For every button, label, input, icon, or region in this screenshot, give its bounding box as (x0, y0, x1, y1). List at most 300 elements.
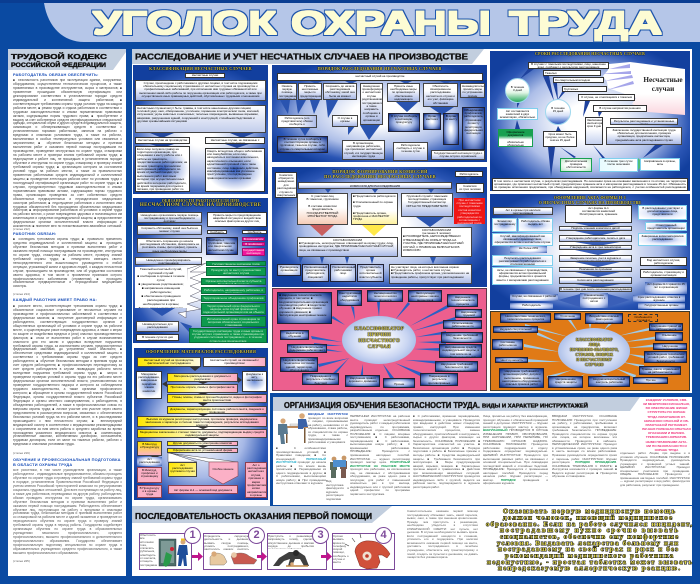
callout: term (543, 131, 577, 147)
panel: documentation (490, 194, 690, 310)
panel: causes classifier (272, 288, 487, 391)
cause box: Эксплуатация неисправных машин, механизмов (411, 291, 439, 302)
box: Акт расследования группового случая (170, 463, 195, 473)
step 4 number (375, 527, 392, 544)
box: Работодателю, страховщику и органам инспекции (643, 270, 684, 277)
warning text: МИ ПО БЕЗОПАСНОСТИ И (646, 444, 687, 448)
box (510, 294, 558, 301)
callout: yellow warning text: пострадавшему нужно срочно вызвать (500, 527, 678, 534)
box (492, 218, 517, 232)
box: notes: ■ Представитель профсоюза органа, уполномоченного на проведение работы, присутствует при расследовании (391, 271, 469, 279)
box (495, 357, 528, 363)
panel title: ПО РАССЛЕДОВАНИЮ НЕСЧАСТНЫХ СЛУЧАЕВ (324, 174, 436, 179)
box: composition 1: ИНСПЕКТОР ТРУДА (308, 214, 337, 218)
box: Утомление (560, 314, 575, 318)
box: Ответственный представитель организации (647, 223, 685, 230)
box (638, 233, 687, 246)
step 1 number (184, 527, 201, 544)
box (493, 207, 553, 215)
step 3 number: 3 (317, 529, 324, 541)
callout: term: Срок может быть продлен, но не более чем на 15 дней (545, 132, 575, 142)
panel: registration of investigation results (134, 348, 268, 500)
text: column 3: ■ С работниками, временно переводимыми, командированными, и учащимися. Проводится при введении в действие новых стандартов, правил, инструкций. При изменении технологических процессов, замене оборудования, приспособлений и инструмента, сырья и других факторов, влияющих на безопасность. ОСНОВНЫЕ ПОЛОЖЕНИЯ: ■ Характеристика опасностей на участке. ■ Безопасная организация работ. ■ Порядок подготовки к работе. ■ Безопасные приемы и методы работы. ■ Средства индивидуальной защиты. ■ Требования безопасности при эксплуатации. ■ Меры предупреждения аварий, взрывов, пожаров. ■ Характерные причины аварий и травматизма. ■ Действия при возникновении аварийных ситуаций. НАСТАВНИЧЕСКИЙ ИНСТРУКТАЖ проводится индивидуально либо с группой, ведется на рабочем месте, подтверждается в журнале регистрации работ. (413, 415, 480, 489)
box (606, 127, 682, 145)
box: Пояснения по причинам (579, 267, 612, 271)
box: composition 3 (401, 193, 453, 217)
step 4 frame (332, 533, 395, 570)
label left: Несчастные случаи на производстве (138, 138, 187, 142)
box (548, 376, 583, 388)
box (137, 357, 201, 367)
box (554, 313, 581, 320)
box: Немедленно проинформировать родственников (146, 258, 191, 265)
warning text: РАБОТАННОЙ РЕГЛАМЕНТ. (645, 423, 688, 427)
box: dark 4 (462, 107, 485, 150)
bar: commission (298, 182, 452, 189)
warning text: ВО ОБЕСПЕЧЕНИЕ ЖИЗНИ (646, 406, 687, 410)
box: dark left: В течение суток сообщить в соответствующие органы о групповом, тяжелом случае, либо случае со смертельным исходом (280, 137, 325, 151)
box (640, 257, 687, 266)
box: Сообщить (248, 230, 261, 234)
callout: yellow warning text: образование. Если на работе случился инцидент, (486, 521, 692, 528)
green box: Государственную инспекцию труда (212, 262, 260, 266)
step 4 number: 4 (380, 529, 387, 541)
box (168, 485, 238, 494)
box (136, 371, 162, 399)
box: role 1: Руководитель организации (280, 265, 298, 272)
box: composition 3: ОРГАН ПО ПРЕДСТАВИТЕЛЮ (406, 204, 448, 208)
centre title: КЛАССИФИКАТОР (576, 338, 612, 342)
box: commission staff (297, 237, 398, 257)
box: role 4 (357, 264, 384, 282)
box: Несчастный случай, не связанный с производством (210, 358, 259, 365)
box: dark 2: Орган местного (426, 114, 438, 121)
box (137, 457, 162, 466)
callout: yellow warning text: пострадавшему на свой страх и риск и без (498, 546, 678, 553)
text: column 4: Лица, принятые на работу без квалификации, проходят обучение с обязательной проверкой знаний и допуском. ИНСТРУКТАЖ — Журнал регистрации проводит мастер в журнале. ВНЕПЛАНОВЫЙ ПРОВОДИТСЯ В СЛУЧАЕ ИЗМЕНЕНИЯ ПРАВИЛ, ОБОРУДОВАНИЯ, ПРИ НАРУШЕНИИ, ПРИ ПЕРЕРЫВЕ, ПО ТРЕБОВАНИЮ ОРГАНОВ НАДЗОРА. ОСНОВНЫЕ ПОЛОЖЕНИЯ: Проводится работникам подразделения и отделу. Содержание определяют индивидуально. ЦЕЛЕВОЙ ИНСТРУКТАЖ: Проводится при выполнении разовых работ, не связанных с основной специальностью. При ликвидации последствий аварий и стихийных бедствий. ПРОВЕДЕНИЕ: Проводится с применением наглядных пособий. Проводится перед началом работ. Журнал регистрации — мастер. ПОРЯДОК проведения и оформления журнала. (483, 415, 548, 485)
box: right definitions: Смерть вследствие общего заболевания или самоубийства; если лицо находилось в состоянии алкогольного, наркотического опьянения; если единственной причиной стало такое состояние; лицо совершало действия, квалифицированные как уголовное преступление, что подтверждено правоохранительными органами (207, 149, 262, 180)
text: column 6: отдельных работ. Лицам, при выдаче и в условиях обучения. ОСНОВНЫЕ ПОЛОЖЕНИЯ: Проводится индивидуально, руководитель учреждения с проверкой устных знаний. ЦЕЛЕВОЙ ИНСТРУКТАЖ: Проводят специальных участников при проведении. ОБЩИЕ ПОЛОЖЕНИЯ: Проводится с применением наглядных пособий. ИНСТРУКТАЖ — журнал регистрации и вид работ, фиксируется для работника, результат при проведении. (620, 452, 690, 487)
box: role 2: Уполномоченный представитель работодателя, специалист (304, 265, 327, 279)
cause box: Конструктивные недостатки оборудования (339, 291, 361, 302)
box: composition 1: ГОСУДАРСТВЕННЫЙ (307, 211, 338, 215)
box: и Прокуратуру (140, 445, 159, 449)
box: Групповых (564, 87, 578, 91)
box: В случае непринятия решения (599, 106, 641, 110)
box: lower: В организацию, направившую работника, где произошел несчастный случай, и в государственную инспекцию труда (344, 141, 383, 158)
panel: labour code column (8, 49, 126, 576)
step: Другие документы по усмотрению комиссии (173, 441, 232, 445)
box: composition 1: В тяжелом, групповом (306, 197, 338, 201)
box (559, 226, 632, 231)
centre title: СТРАХОВ, ПОВРЕЖ (575, 353, 613, 357)
box: role 3 (330, 264, 356, 282)
cause box (337, 290, 362, 306)
heading: worker duties: РАБОТНИК ОБЯЗАН: (13, 231, 56, 236)
box (588, 376, 630, 387)
box: Неприменение средств защиты (555, 377, 577, 384)
box: commission staff: ■ Руководитель, непосредственно отвечающий за охрану труда; лицо, проводившее инструктаж; ГДЕ ПРОИЗОШЕЛ НЕСЧАСТНЫЙ СЛУЧАЙ; лица, не связанные с производством (299, 241, 394, 252)
box: Работодатель обязан выдать акт (521, 219, 550, 226)
box: act green: Оформление документов (507, 130, 524, 137)
box: В течение трех суток после окончания (604, 159, 633, 166)
note: article 225: (статья 225) (13, 559, 30, 563)
box: Тяжелых (545, 71, 557, 75)
box: Несоблюдение технических условий работ, требований безопасности (647, 352, 684, 363)
box: Незамедлительно для расследования (142, 322, 173, 329)
cause box (367, 290, 403, 302)
cause box: Прочие (394, 382, 404, 386)
box (207, 230, 227, 234)
box (655, 332, 683, 341)
box (203, 357, 266, 367)
box: accidents (185, 73, 225, 78)
step: Документы, характеризующие состояние рабочего места, сведения о проведении (170, 407, 264, 414)
box: Подпись членами комиссии и датой (571, 226, 620, 230)
box: Документы к акту, заключения (246, 372, 263, 382)
box (638, 303, 685, 309)
box: consequences: Несчастным случаем могут быть: травмы, в том числе нанесенные другими лицами; тепловой удар; ожог, обморожение, утопление; поражение электрическим током, молнией, излучением; укусы животных и насекомых; телесные повреждения, вызванные взрывами, авариями, разрушением зданий, сооружений и конструкций, стихийными бедствиями и другими чрезвычайными ситуациями (137, 106, 259, 123)
panel title: ОФОРМЛЕНИЕ АКТА ФОРМЫ Н-1 (554, 196, 626, 200)
box: dark 4: Объединение профсоюзов, работодатель, страховщик по месту регистрации, федеральная инспекция (464, 108, 483, 135)
box: composition 2 (351, 193, 398, 225)
box: Направление в органы, акты (644, 159, 676, 166)
label left (135, 137, 190, 144)
box (136, 334, 179, 341)
cause box (345, 375, 380, 387)
box (135, 257, 202, 265)
box (207, 212, 267, 227)
circle: 15 days: В течение (551, 106, 565, 110)
box: dark (206, 237, 238, 255)
panel: training organisation (273, 397, 692, 505)
box: dark 1: О случае сообщить в инспекцию, прокуратуру (391, 114, 417, 124)
box: В Минтруд (142, 442, 157, 446)
cause box: Нарушение правил дорожного движения (349, 376, 377, 383)
box (593, 105, 647, 112)
step 2 number (248, 527, 265, 544)
box: commission staff right (401, 227, 472, 257)
box: Акт формы Н-1 — основной вид документа (174, 488, 232, 492)
centre title: ПРИЧИН (367, 333, 391, 338)
step 2 frame (203, 533, 262, 570)
arrow box: Особое мнение (212, 467, 234, 471)
box: left note: ■ уведомление родственников; (139, 282, 183, 286)
box: bottom 1: Работодателю сообщить о случае в течение суток (396, 143, 425, 153)
box: act green: обязательно (507, 140, 524, 144)
box (559, 245, 632, 250)
box: Опьянение (662, 333, 677, 337)
box (510, 246, 547, 253)
cause box: Неудовлетворительное техническое состояние зданий, территории, оборудования (283, 358, 315, 372)
box: left note: ■ сообщение в органы в течение суток; (137, 274, 185, 282)
box: form N-1: Регистрация акта, хранение (580, 212, 617, 216)
title: УГОЛОК (93, 5, 277, 41)
text: column 1 lower: ■ С особенностями производственных условий; ■ Правилами поведения; ■ Со спецодеждой; ПЕРВИЧНЫЙ ИНСТРУКТАЖ проводят до начала работы: ■ Со всеми вновь принятыми; ■ Переводимыми из одного подразделения в другое; ■ С работниками, выполняющими новую работу; ■ При проведении инструктажа отмечают в журнале (276, 447, 326, 485)
panel: victim classifier (490, 311, 690, 391)
centre title (569, 337, 620, 367)
box: left note: ■ обеспечение проведения расследования при необходимости в органы; (141, 294, 181, 306)
labour code header: РОССИЙСКОЙ ФЕДЕРАЦИИ (11, 61, 106, 69)
step 1 frame (139, 533, 192, 570)
text: worker duties: ■ соблюдать требования охраны труда; ■ правильно применять средства индивидуальной и коллективной защиты; ■ проходить обучение безопасным методам и приемам выполнения работ и оказанию первой помощи пострадавшим на производстве, инструктаж по охране труда, стажировку на рабочем месте, проверку знаний требований охраны труда; ■ немедленно извещать своего непосредственного или вышестоящего руководителя о любой ситуации, угрожающей жизни и здоровью людей, о каждом несчастном случае, происшедшем на производстве, или об ухудшении состояния своего здоровья, в том числе о проявлении признаков острого профессионального заболевания (отравления); ■ проходить обязательные предварительные и периодические медицинские осмотры. (13, 238, 122, 288)
centre title: ПОЧВЕННО-ПЫЛЕВОГО, (570, 348, 619, 352)
box: Утверждение акта в трех экземплярах (570, 245, 621, 249)
box: commission (456, 183, 484, 193)
panel: first aid sequence (132, 506, 692, 576)
panel title (139, 198, 262, 208)
box: Заключение государственной инспекции труда обязательно для выполнения, проверка организации, предписание инспектора, предъявление акта расследования случая (613, 128, 675, 142)
label: accidents: Несчастные (643, 76, 683, 84)
panel title: СРОКИ РАССЛЕДОВАНИЯ НЕСЧАСТНЫХ СЛУЧАЕВ (535, 52, 645, 56)
box: composition 1 (297, 193, 348, 225)
box: green: Дополнительная проверка обстоятельств (565, 159, 587, 169)
centre title: И НЕСЧАСТНОМУ (576, 358, 612, 362)
box: bottom 2 (431, 150, 485, 160)
warning text: СТРУКТУРЫ ПО ОХРАНЕ (648, 410, 685, 414)
step (167, 448, 238, 453)
box: Неосторожность (501, 358, 523, 362)
green box: Территориальное объединение профсоюзов (203, 296, 264, 300)
cause box (455, 309, 482, 318)
step: Планы, эскизы, схемы и при необходимости, видео и фотографии места происшествия (172, 395, 262, 402)
box: Заключение инспектора, срок 3 дня (587, 118, 603, 128)
magenta box: В прокуратуру (244, 237, 263, 241)
circle: 3 days (505, 78, 530, 103)
step 3 number (312, 527, 329, 544)
cause box: Неудовлетворительное содержание рабочих мест (290, 345, 325, 352)
box: Заверенные копии материалов расследования (642, 234, 684, 241)
box: composition 2: ■ Представитель органа, профсоюза и ИНСПЕКТОР ТРУДА (353, 211, 389, 221)
heading: worker rights: КАЖДЫЙ РАБОТНИК ИМЕЕТ ПРАВО НА: (13, 297, 97, 302)
panel: accident investigation procedure (272, 65, 487, 162)
box (633, 377, 668, 384)
box: Нарушение правил на рабочем месте (651, 324, 681, 331)
box: commission staff right: СОСТАВ КОМИССИИ (422, 228, 451, 232)
box (653, 343, 687, 350)
callout: yellow warning text: должен человек, имеющий медицинское (503, 514, 672, 522)
box: Материалы расследования, заверенные подписями членов комиссии (138, 372, 160, 393)
box: Прочие (646, 378, 656, 382)
step 3 frame (267, 533, 327, 570)
panel: forming the commission (272, 167, 487, 287)
callout: yellow warning text: рекомендаций медицинского работника (505, 552, 674, 560)
box (628, 314, 658, 322)
box (645, 282, 687, 294)
warning text: КАЖДОМУ УСЛОВИЯ, СВЯ- (646, 398, 687, 402)
warning text (642, 398, 691, 452)
box: act (277, 73, 483, 81)
centre title (354, 326, 404, 350)
box: dark 3 (443, 113, 459, 145)
box: act green (498, 129, 533, 147)
box (137, 467, 162, 483)
header band: ОРГАНИЗАЦИЯ ОБУЧЕНИЯ БЕЗОПАСНОСТИ ТРУДА. (284, 400, 480, 410)
box (136, 321, 179, 332)
cause box: Нарушение требований безопасности (446, 333, 478, 340)
cause box: ■ Нарушение технологического процесса, в том числе: ■ Неудовлетворительная организация производства работ; ■ Недостатки обучения; ■ Нарушение правил дорожного движения; ■ Эксплуатация неисправных машин (279, 293, 328, 317)
box: Нарушение требований к организации работ, допуск к выполнению, применение неисправного оборудования, опасных приемов работ (502, 369, 541, 386)
callout: yellow warning text: непредсказуемую аллергическую реакцию. (498, 565, 680, 572)
box: notes: Не участвуют лица, на которых возложена охрана: (391, 265, 459, 269)
box (640, 158, 680, 171)
centre title: КЛАССИФИКАТОР (354, 327, 404, 332)
label: accidents: случаи (652, 85, 674, 93)
labour code header: ТРУДОВОЙ КОДЕКС (11, 52, 107, 61)
box: composition 2: ■ Уполномоченный по охране труда (353, 200, 393, 208)
box: Несчастный случай на производстве, фактический акт пострадавшего (144, 358, 194, 365)
box (242, 371, 267, 392)
note: article 219: (статья 219) (13, 451, 30, 455)
box: column 6: Обеспечить своевременное расследование несчастного случая и его учет, фиксацию обстановки (426, 84, 455, 105)
box (492, 267, 553, 285)
box: В расследовании участвуют и дополнительные лица, представители (642, 206, 683, 216)
panel: medical and investigation procedure (133, 198, 268, 343)
cause box (420, 373, 458, 386)
step (167, 373, 238, 382)
cause box: Повреждения в результате стихийных бедствий (306, 374, 335, 385)
box: accidents: Несчастные случаи (192, 73, 218, 77)
cause box (277, 292, 332, 324)
green box: Территориальный орган федерального надзора, если случай произошел в подконтрольной организации или на объекте (203, 304, 264, 314)
box (559, 277, 632, 284)
circle: 3 days: В течение (511, 85, 524, 89)
box: В течение трех дня после окончания расследования (560, 287, 631, 291)
box: notes: ■ Руководитель работ, о несчастном случае; (391, 268, 451, 272)
box: Принять меры по предотвращению аварийной ситуации и воздействию опасных факторов на других лиц (213, 213, 261, 223)
panel title: ПОРЯДОК РАССЛЕДОВАНИЯ НЕСЧАСТНЫХ СЛУЧАЕВ (318, 66, 442, 71)
header band: ПОСЛЕДОВАТЕЛЬНОСТЬ ОКАЗАНИЯ ПЕРВОЙ ПОМОЩИ (135, 510, 372, 521)
panel title (324, 168, 436, 180)
box: role 2 (302, 264, 329, 282)
box: composition 1: представитель (312, 207, 333, 211)
box: top right (455, 171, 483, 177)
box: commission staff right: (не менее 3 человек) (422, 231, 451, 235)
box: accidents at work: Случаи, происшедшие с работниками и другими лицами, в том числе подлежащими обязательному социальному страхованию от несчастных случаев на производстве и профессиональных заболеваний, при исполнении ими трудовых обязанностей или выполнении какой-либо работы по поручению организации или работодателя, а также при осуществлении иных правомерных действий, обусловленных трудовыми отношениями (139, 81, 262, 98)
panel: classification of accidents (133, 65, 268, 194)
box: commission staff right: ■ РУКОВОДИТЕЛЬ, НЕПОСРЕДСТВЕННО ОТВЕЧАЮЩИЙ ЗА ОХРАНУ ТРУДА НА УЧАСТКЕ, ГДЕ ПРОИЗОШЕЛ НЕСЧАСТНЫЙ СЛУЧАЙ, С ПРАВОМ НЕ ВКЛЮЧАТЬСЯ В КОМИССИЮ (403, 234, 463, 252)
box: form N-1: составляется комиссией (582, 209, 615, 213)
step: Медицинское заключение о степени тяжести, документы, подтверждающие выдачу средств индивидуальной защиты (140, 430, 264, 437)
box: green (560, 158, 592, 172)
box: Обеспечить сохранение до начала расследования обстановки, фиксировать ее (составить схемы, фотографии), принять иные необходимые меры (140, 239, 199, 253)
header band: ВИДЫ И ХАРАКТЕР ИНСТРУКТАЖЕЙ (482, 402, 588, 410)
box: Травмы, ожоги, отравления на рабочем месте (642, 367, 679, 374)
text: worker rights: ■ рабочее место, соответствующее требованиям охраны труда; ■ обязательное социальное страхование от несчастных случаев на производстве и профессиональных заболеваний в соответствии с федеральным законом; ■ получение достоверной информации от работодателя, соответствующих государственных органов и общественных организаций об условиях и охране труда на рабочем месте, о существующем риске повреждения здоровья, а также о мерах по защите от воздействия вредных и (или) опасных производственных факторов; ■ отказ от выполнения работ в случае возникновения опасности для его жизни и здоровья вследствие нарушения требований охраны труда, за исключением случаев, предусмотренных федеральными законами, до устранения такой опасности; ■ обеспечение средствами индивидуальной и коллективной защиты в соответствии с требованиями охраны труда за счет средств работодателя; ■ обучение безопасным методам и приемам труда за счет средств работодателя; ■ профессиональную переподготовку за счет средств работодателя в случае ликвидации рабочего места вследствие нарушения требований охраны труда; ■ запрос о проведении проверки условий и охраны труда на его рабочем месте федеральным органом исполнительной власти, уполномоченным на проведение государственного надзора и контроля за соблюдением трудового законодательства, а также органами профсоюзного контроля; ■ обращение в органы государственной власти Российской Федерации, органы государственной власти субъектов Российской Федерации и органы местного самоуправления, к работодателю, в объединения работодателей, а также в профессиональные союзы по вопросам охраны труда; ■ личное участие или участие через своего представителя в рассмотрении вопросов, связанных с обеспечением безопасных условий труда на его рабочем месте, и в расследовании происшедшего с ним несчастного случая; ■ внеочередной медицинский осмотр в соответствии с медицинскими рекомендациями с сохранением за ним места работы и среднего заработка во время прохождения указанного медицинского осмотра; ■ компенсации, установленные законом, коллективным договором, соглашением, трудовым договором, если он занят на тяжелых работах, работах с вредными и опасными условиями труда. (13, 305, 122, 446)
cause box: Несовершенство технологического процесса (373, 291, 397, 302)
box: composition 1: С участием лиц (311, 194, 334, 198)
warning text: НЫМИ ПРАВОВЫМИ АКТА- (646, 440, 687, 444)
centre title: ЛИЦА (588, 343, 600, 347)
box: Акт о расследовании несчастного случая, причинах и мерах профилактики, копии направляются в органы (247, 463, 267, 497)
box: dark 1 (388, 113, 420, 132)
box: Сообщить (210, 230, 224, 234)
box: О случае, не относящемся к тяжелым (581, 95, 632, 99)
box: В Минтруд, профсоюз и страховщику (141, 468, 158, 478)
heading: training (13, 457, 121, 467)
box: dark 2 (423, 113, 441, 130)
box: lower centre (332, 115, 358, 127)
box: Случай, квалифицированный как связанный с производством, оформляется актом о несчастном случае (495, 234, 550, 244)
box: dark 3: В орган по месту (445, 114, 457, 121)
centre ellipse (558, 328, 630, 374)
step: Материалы расследования и документы о результатах (174, 374, 231, 381)
cause box: Нарушение технологического процесса (451, 295, 474, 306)
box: dark: Сообщить о групповом, тяжелом или смертельном несчастном случае (208, 238, 235, 252)
green box (206, 261, 266, 266)
step (167, 384, 238, 393)
panel: accident right column (490, 51, 690, 191)
investigation heading: РАССЛЕДОВАНИЕ И УЧЕТ НЕСЧАТНЫХ СЛУЧАЕВ НА ПРОИЗВОДСТВЕ (135, 52, 468, 62)
box: commission: Комиссия (464, 184, 476, 188)
investigation heading (132, 49, 484, 64)
centre title: СЛУЧАЮ (585, 363, 603, 367)
box: form N-1: Акт формы Н-1 (588, 206, 609, 210)
box: Сохранить обстановку, какой она была на момент случая (141, 226, 198, 233)
box: Копия акта расследования (578, 278, 613, 282)
box: composition 2: ■ Представители работодателя (353, 194, 395, 198)
panel title (538, 195, 642, 205)
step: Протоколы опроса, схемы и фотографии места (171, 385, 234, 389)
callout: yellow warning text: условия. Выдавать лекарства больному или (497, 540, 678, 547)
labour code header (8, 49, 126, 70)
circle: 3 days: 3 дней (513, 88, 522, 92)
cause box (441, 332, 483, 343)
box (493, 326, 538, 333)
box: Акт в органы при наличии расследования (506, 208, 540, 215)
step 2 number: 2 (253, 529, 260, 541)
box: Со смертельным исходом (555, 78, 590, 82)
box: left note: ■ направление извещения работодателю; (142, 286, 180, 294)
box (585, 117, 603, 145)
heading: training: В ОБЛАСТИ ОХРАНЫ ТРУДА (13, 462, 72, 467)
box: Экземпляр пострадавшему (494, 219, 515, 226)
cause box (443, 320, 482, 329)
centre title: СЛУЧАЯ (368, 345, 391, 350)
callout: yellow warning text: Оказывать первую медицинскую помощь (503, 508, 676, 515)
green box (206, 267, 266, 276)
box (559, 255, 632, 262)
box: Несоответствие технического, технологического процесса (505, 314, 546, 321)
box: composition 1: В составе комиссии (308, 204, 337, 208)
box (500, 313, 551, 323)
cause box (280, 330, 309, 340)
box: left note (135, 267, 187, 308)
box: right definitions (205, 148, 265, 192)
box (242, 230, 267, 234)
magenta box: В профсоюз (245, 242, 262, 246)
heading: training: ОБУЧЕНИЕ И ПРОФЕССИОНАЛЬНАЯ ПОДГОТОВКА (13, 457, 121, 462)
cause box (383, 378, 415, 388)
box (578, 94, 635, 101)
box (599, 158, 638, 172)
panel title: ОФОРМЛЕНИЕ МАТЕРИАЛОВ РАССЛЕДОВАНИЯ (146, 349, 256, 354)
text: column 5: ВВОДНЫЙ ИНСТРУКТАЖ. ОСНОВНЫЕ ПОЛОЖЕНИЯ: Проводится при поступлении на работу, с работниками, прибывшими в организацию на предприятие, включает требования безопасности. ПРОВЕДЕНИЕ: Проводится специалистом по охране труда или лицом, на которое возложены эти обязанности. Проводится в кабинете. ПЕРИОДИЧЕСКИЙ ИНСТРУКТАЖ: Проводят в установленные сроки, не реже одного раза в шесть месяцев со всеми работниками. Приказом руководителя определяются сроки и перечень работ. ИНСТРУКТАЖ: Журнал регистрации. ПОРЯДОК ПРОВЕДЕНИЯ. ОСНОВНЫЕ ТРЕБОВАНИЯ К РАБОТЕ: ■ Инструктаж начинается с проверки знаний. ■ Ведется журнал регистрации. ■ Проводится обучение и стажировка. (552, 415, 617, 478)
title: ОХРАНЫ (291, 5, 491, 41)
panel title: ПОРЯДОК ФОРМИРОВАНИЯ КОМИССИЙ (332, 169, 428, 174)
box (559, 267, 632, 272)
box: lower centre: О случае в органы (338, 116, 352, 123)
box: role 1 (277, 264, 301, 276)
box: composition 3: Групповой случай с тяжелыми последствиями, страховщик (407, 194, 447, 201)
box (580, 293, 608, 308)
panel title: ОБЯЗАННОСТИ РАБОТОДАТЕЛЯ ПРИ (162, 199, 239, 203)
box (638, 205, 687, 220)
warning text: ТРУДА РАБОТНИКОВ ОТ. (647, 415, 686, 419)
note: article 212: (статья 212) (13, 227, 30, 231)
box (168, 462, 197, 477)
box: act: несчастный случай на производстве (355, 74, 405, 78)
